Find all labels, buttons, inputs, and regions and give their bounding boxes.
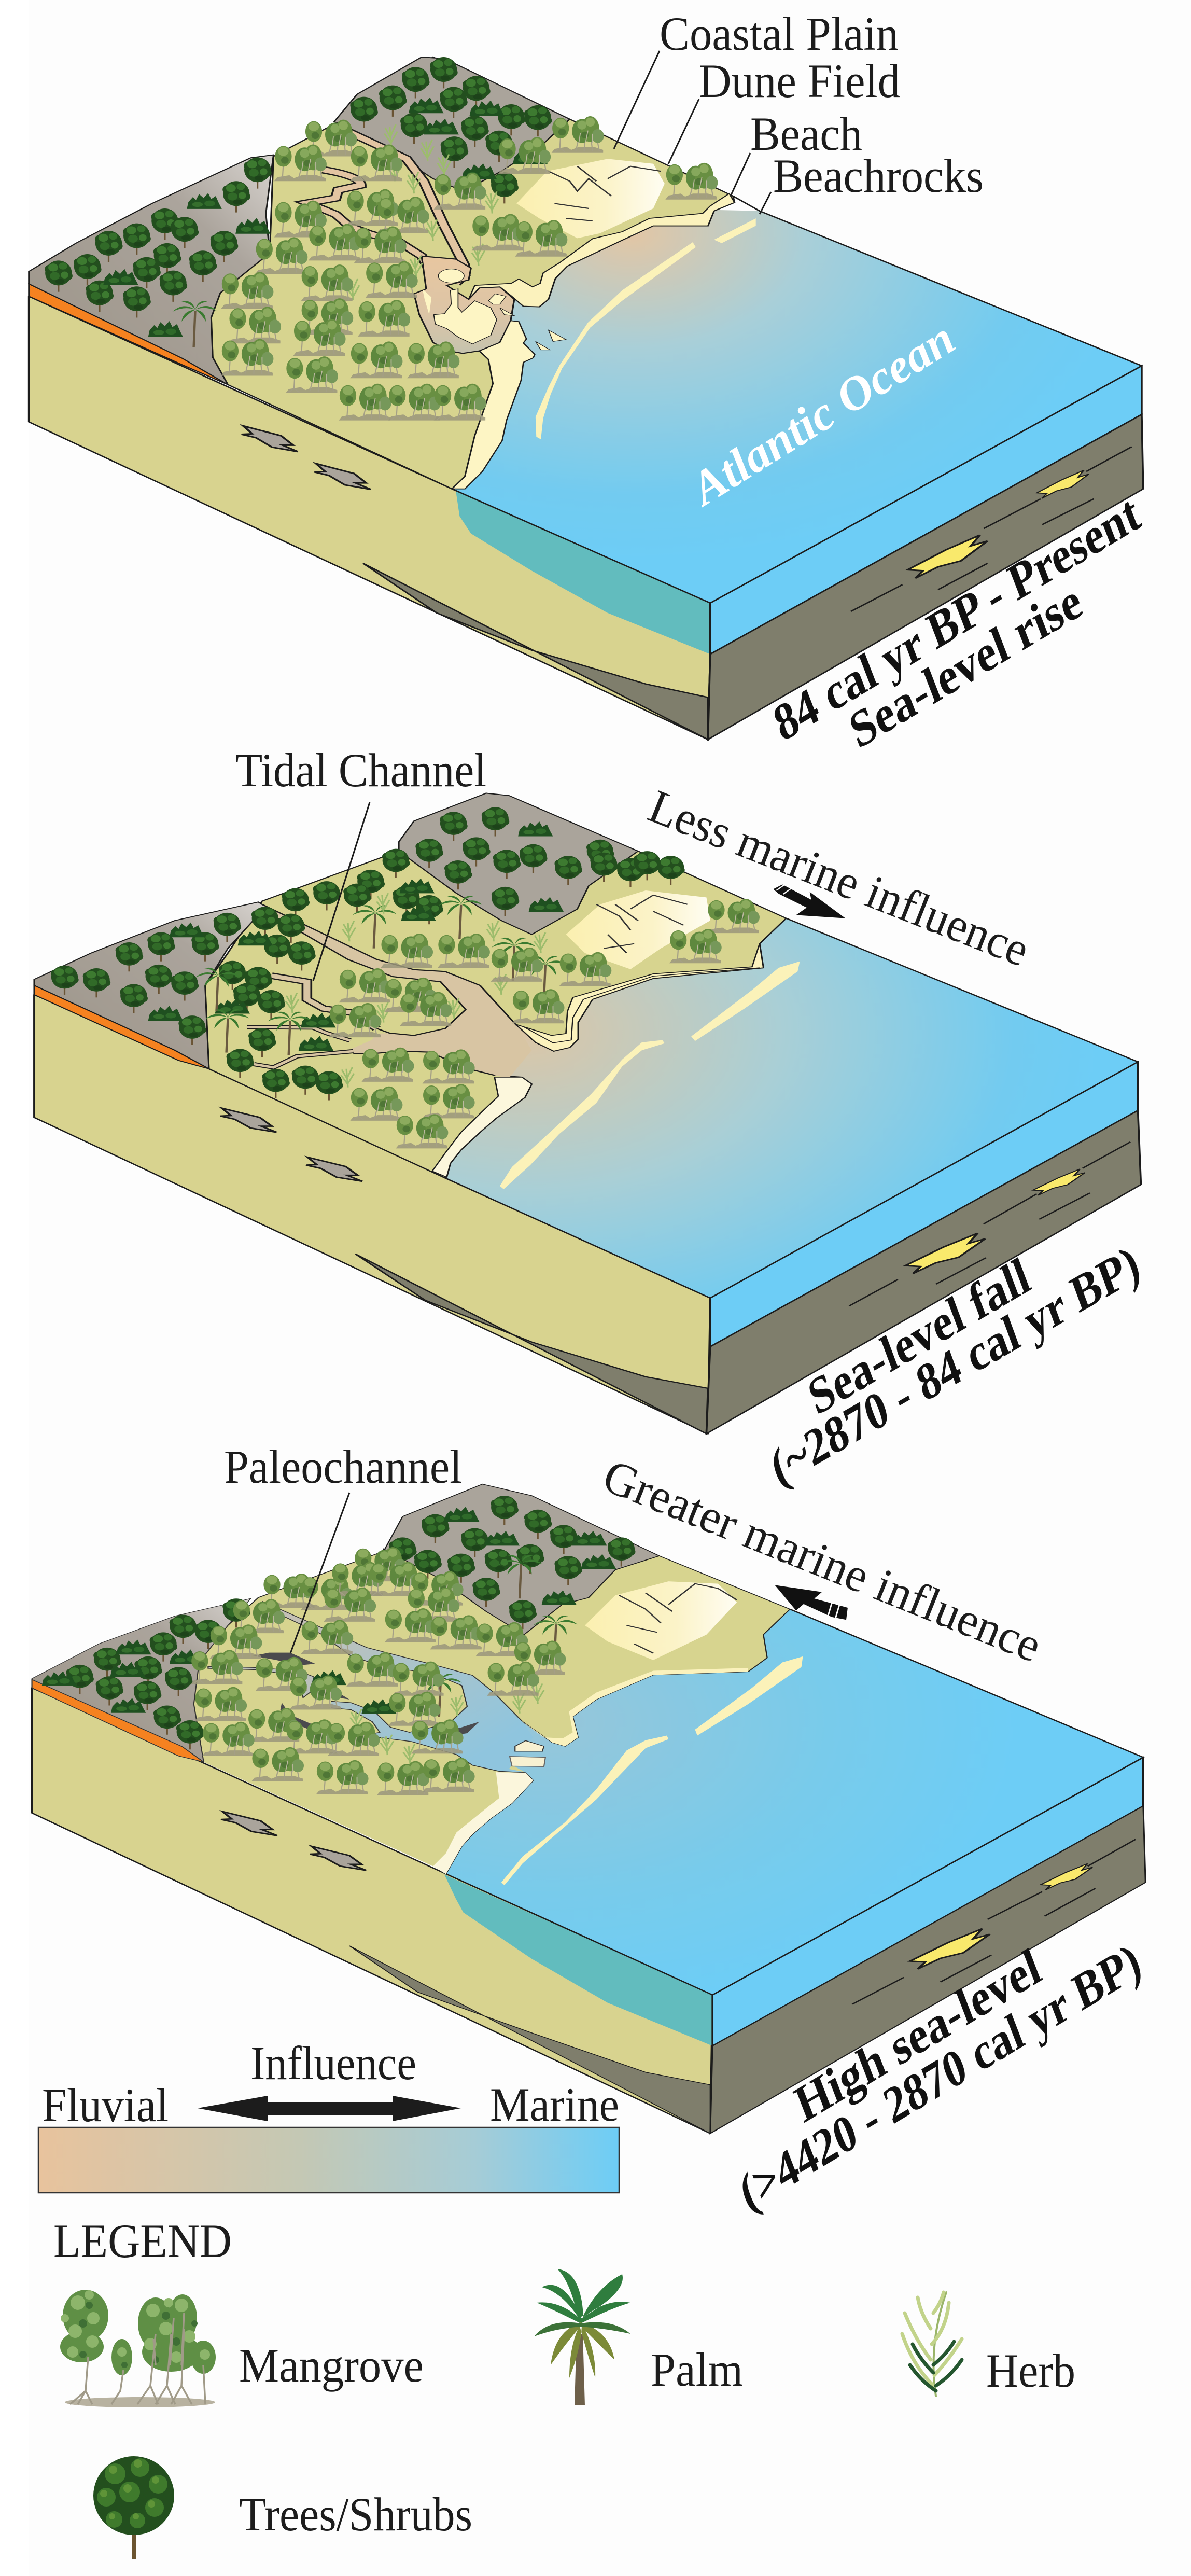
legend label: Herb: Herb [986, 2344, 1075, 2397]
legend heading: LEGEND [53, 2215, 232, 2267]
label: Influence: Influence [250, 2037, 416, 2090]
panel: sea-level rise block diagram [29, 7, 1147, 760]
panel: high sea-level block diagram [32, 1440, 1147, 2222]
label: Beachrocks: Beachrocks [773, 149, 984, 202]
label: Greater marine influence: Greater marine influence [596, 1449, 1049, 1672]
icon: mangrove [60, 2290, 216, 2407]
label: Paleochannel: Paleochannel [224, 1440, 462, 1493]
legend label: Mangrove: Mangrove [239, 2339, 424, 2392]
label: date range above 4420: (>4420 - 2870 cal yr BP) [732, 1932, 1147, 2222]
influence scale [38, 2037, 619, 2193]
block diagram: high sea-level [32, 1484, 1145, 2134]
legend label: Palm: Palm [651, 2343, 743, 2396]
label: Fluvial: Fluvial [42, 2079, 169, 2132]
label: Dune Field: Dune Field [699, 54, 900, 107]
label: Less marine influence: Less marine influence [642, 779, 1036, 977]
label: Coastal Plain: Coastal Plain [660, 7, 899, 60]
block diagram: present day [29, 57, 1143, 740]
label: Sea-level fall: Sea-level fall [801, 1246, 1036, 1426]
legend label: Trees/Shrubs: Trees/Shrubs [239, 2488, 472, 2541]
icon: palm [534, 2269, 630, 2405]
label: Marine: Marine [490, 2078, 619, 2131]
label: High sea-level: High sea-level [788, 1937, 1047, 2134]
gradient bar [38, 2127, 619, 2193]
leader lines [614, 51, 771, 214]
label: Sea-level rise: Sea-level rise [842, 571, 1089, 760]
label: Beach: Beach [750, 107, 862, 160]
legend [53, 2215, 1075, 2559]
label: Atlantic Ocean: Atlantic Ocean [679, 311, 964, 517]
panel: sea-level fall block diagram [34, 744, 1146, 1497]
label: Tidal Channel: Tidal Channel [235, 744, 486, 797]
block diagram: sea-level fall [34, 793, 1141, 1434]
arrow: double-headed [198, 2096, 461, 2121]
icon: tree [93, 2456, 174, 2559]
leader line: Tidal Channel [313, 802, 370, 981]
leader line: Paleochannel [290, 1493, 349, 1653]
icon: herb [902, 2292, 962, 2396]
label: 84 cal yr BP - Present: 84 cal yr BP - Present [766, 483, 1147, 753]
label: date range 2870-84: (~2870 - 84 cal yr BP) [763, 1234, 1146, 1497]
